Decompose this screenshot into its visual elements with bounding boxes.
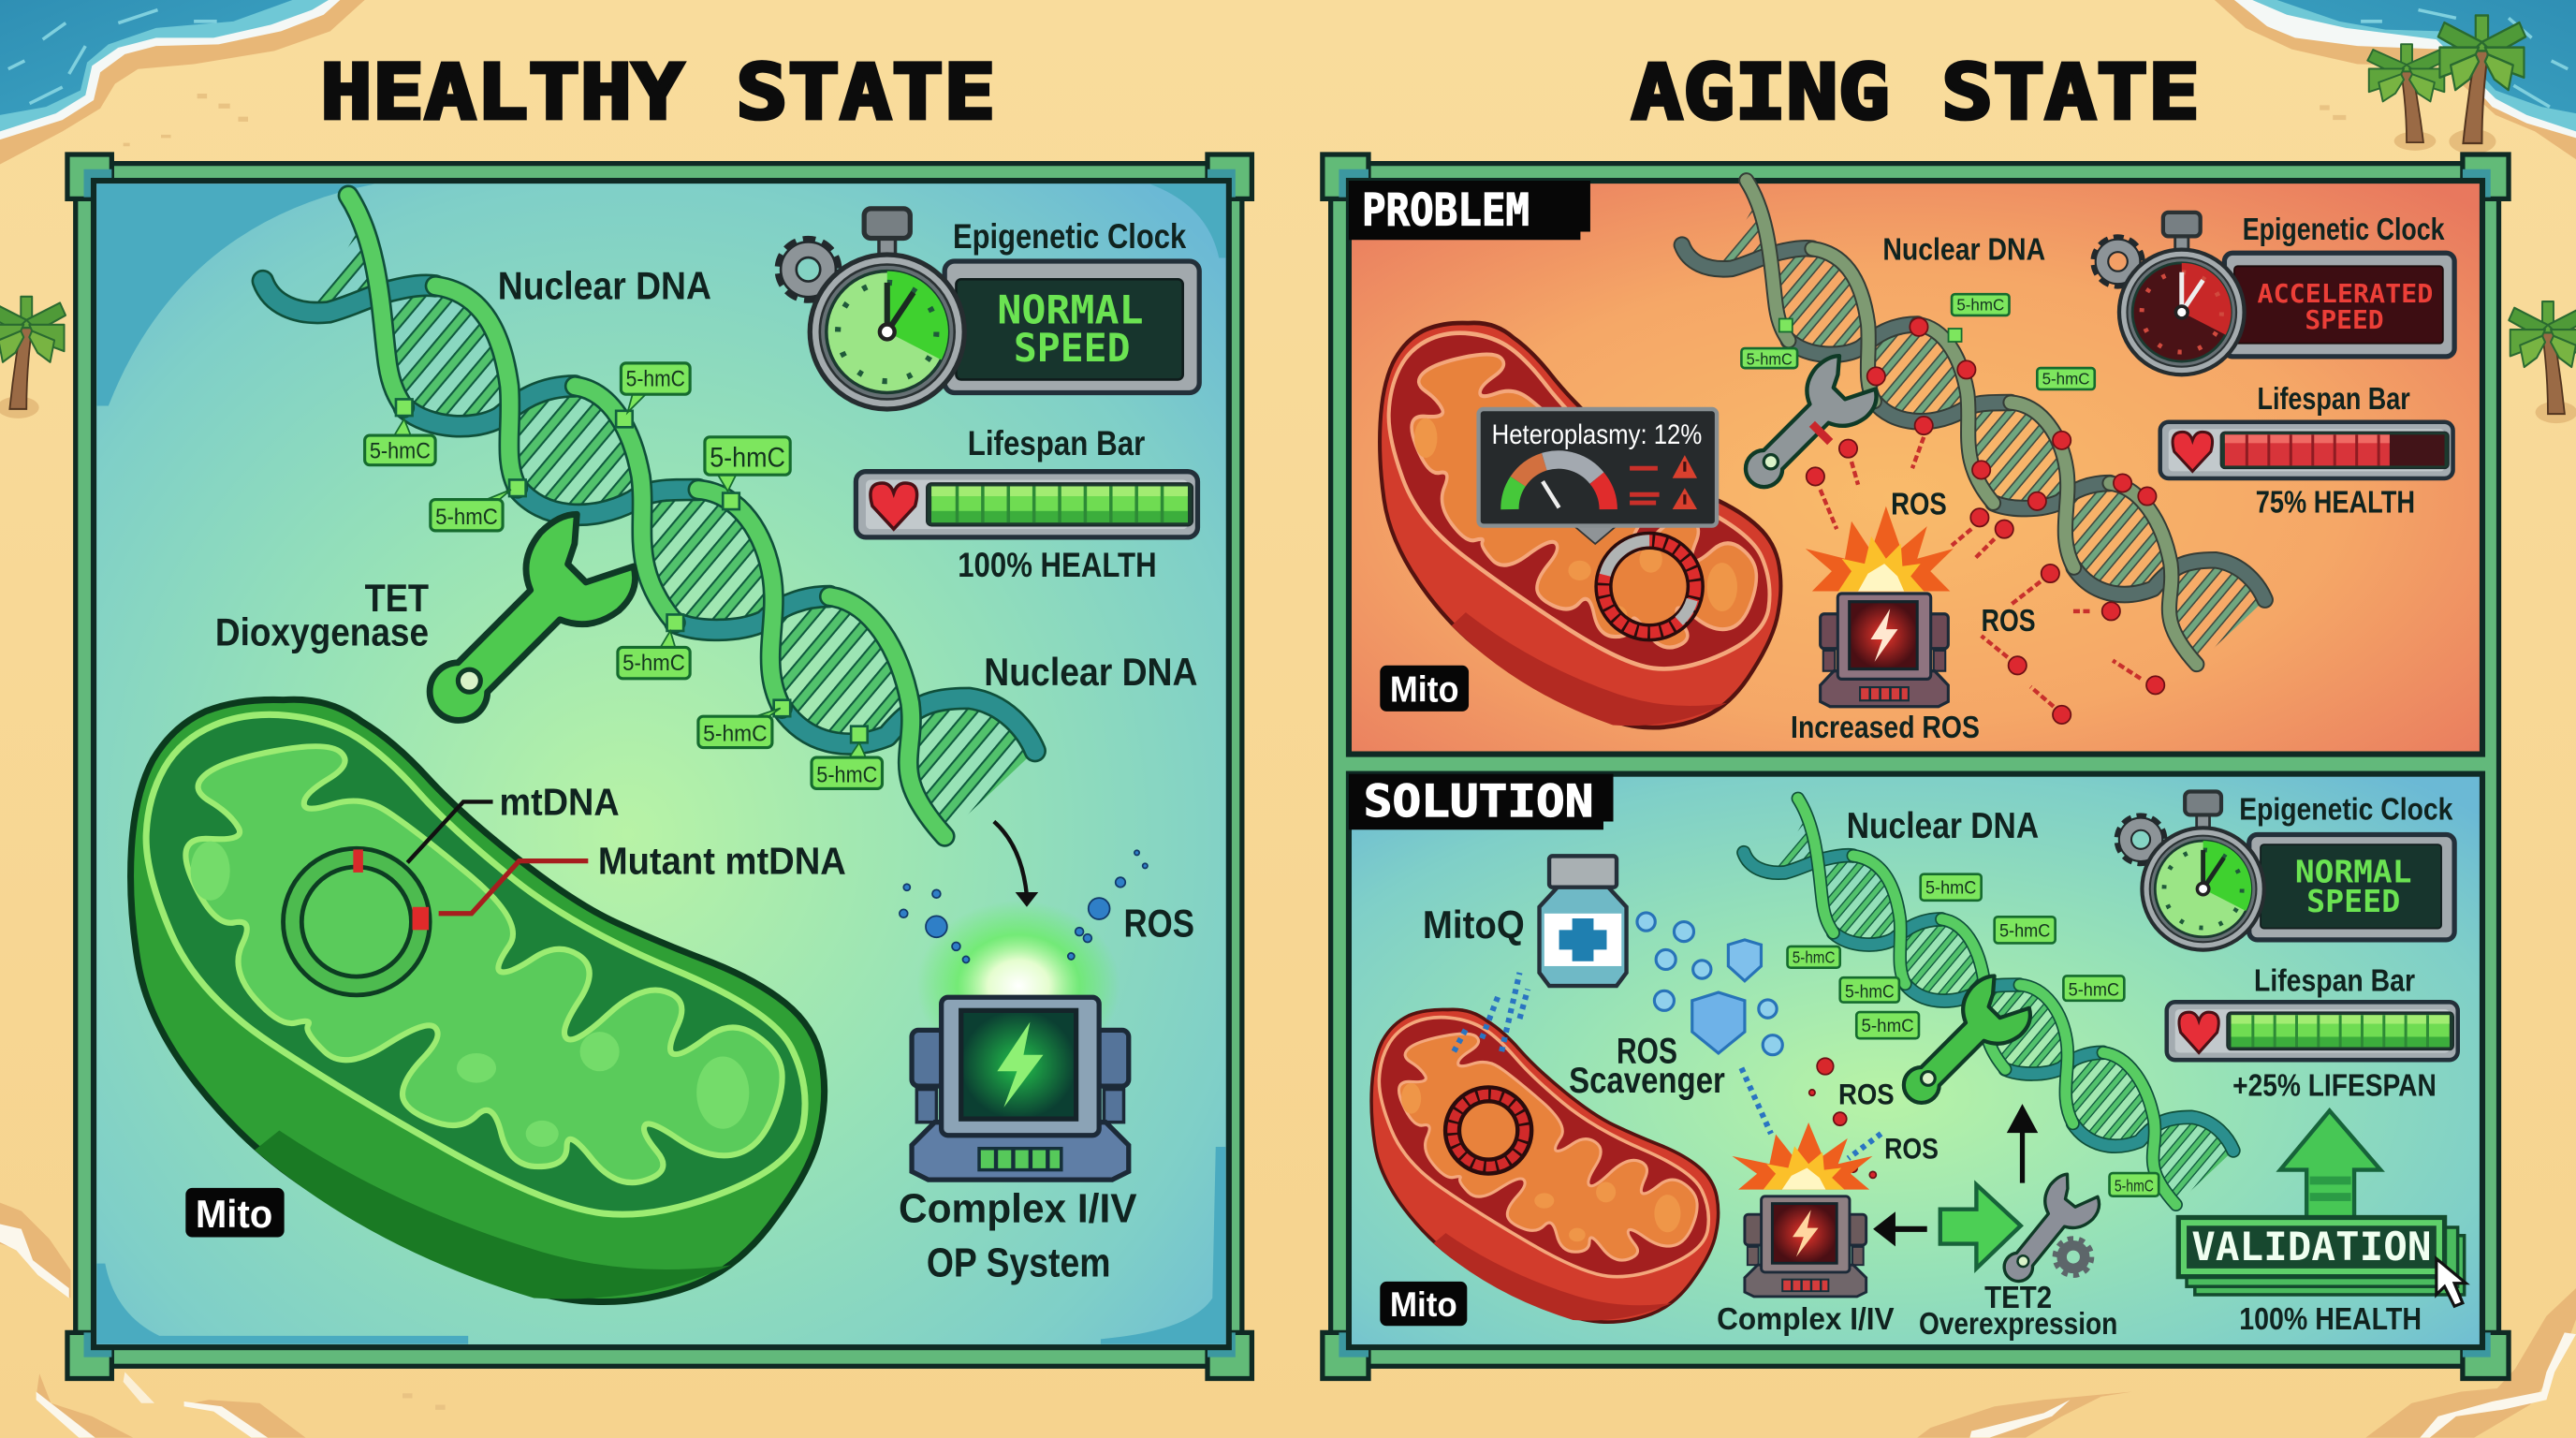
5-hmC tags: [1741, 294, 2095, 389]
lifespan bar: 75%: [2160, 382, 2453, 521]
5-hmC tags: 5-hmC: [370, 440, 431, 464]
callout: heteroplasmy: Heteroplasmy: 12%: [1492, 419, 1702, 450]
lifespan bar: full: +25% LIFESPAN: [2232, 1069, 2437, 1104]
label: tet2 overexpression: [1919, 1281, 2117, 1342]
explosion: [1732, 1123, 1872, 1190]
icon: complex system: [912, 997, 1129, 1180]
5-hmC tags: 5-hmC: [1925, 879, 1976, 899]
5-hmC tags: [1788, 874, 2159, 1196]
5-hmC tags: 5-hmC: [703, 723, 768, 747]
epigenetic clock readout: normal: [2118, 791, 2454, 950]
mitochondrion: under repair: [1371, 1009, 1719, 1322]
sand specks: [124, 94, 2346, 1410]
panel: healthy state: [67, 154, 1251, 1378]
label: nuclear dna: Nuclear DNA: [1882, 232, 2045, 267]
5-hmC tags: 5-hmC: [816, 763, 877, 787]
epigenetic clock readout: NORMAL: [997, 287, 1144, 333]
icon: ros scavenger bubbles and shields: [1637, 913, 1782, 1055]
icon: cursor: [2437, 1258, 2466, 1306]
label: mito: Mito: [1390, 1285, 1457, 1324]
ros trails: [1821, 437, 2141, 707]
palm tree: right: [2509, 301, 2576, 423]
button: validation: VALIDATION: [2191, 1224, 2432, 1269]
labels: ros: ROS: [1884, 1131, 1939, 1165]
labels: ros: ROS: [1982, 604, 2036, 638]
dna helix: damaged: [1682, 181, 2265, 665]
wet sand: bottom left: [0, 1203, 305, 1438]
palm tree: left: [0, 297, 66, 418]
warning icons: [1630, 455, 1697, 509]
button: validation: [2178, 1217, 2466, 1306]
mtdna ring: [292, 849, 429, 986]
panel frame: [1323, 154, 2509, 1378]
icon: green wrench: [1885, 969, 2039, 1122]
labels: ros: ROS: [1891, 487, 1947, 521]
epigenetic clock readout: normal: NORMAL: [2295, 853, 2411, 889]
label: mito: Mito: [1390, 669, 1459, 710]
icon: tet dioxygenase wrench: [400, 503, 649, 752]
label: mutant mtdna: Mutant mtDNA: [598, 840, 846, 883]
lifespan bar: 75%: Lifespan Bar: [2258, 382, 2410, 417]
icon: ros bubbles: [900, 850, 1148, 962]
label: 100% health: 100% HEALTH: [2239, 1302, 2422, 1337]
epigenetic clock readout: accelerated: [2095, 213, 2454, 374]
5-hmC tags: 5-hmC: [2069, 981, 2119, 1001]
epigenetic clock readout: Epigenetic Clock: [953, 217, 1187, 256]
complex glow: [916, 901, 1120, 1071]
heading: solution: SOLUTION: [1364, 776, 1593, 828]
palm tree: top right small: [2367, 44, 2446, 151]
lifespan bar: Lifespan Bar: [968, 424, 1145, 462]
5-hmC tags: 5-hmC: [1862, 1017, 1914, 1036]
epigenetic clock readout: normal: Epigenetic Clock: [2239, 793, 2453, 828]
leader line: mutant mtdna: [439, 861, 588, 914]
label: tet dioxygenase: [215, 576, 429, 654]
epigenetic clock readout: accelerated: ACCELERATED: [2258, 280, 2433, 309]
label: ros scavenger: ROS: [1617, 1032, 1677, 1072]
labels: ros: [1891, 487, 2036, 638]
heading: problem: [1349, 181, 1590, 240]
labels: ros: ROS: [1838, 1077, 1895, 1110]
mitochondrion: healthy: [131, 699, 825, 1302]
5-hmC tags: 5-hmC: [2115, 1176, 2154, 1195]
label: complex i/iv op system: [899, 1186, 1137, 1286]
label: complex i/iv: Complex I/IV: [1717, 1302, 1895, 1337]
lifespan bar: full: [2167, 963, 2458, 1104]
5-hmC tags: 5-hmC: [710, 442, 785, 473]
arrow: tet2 green: [1940, 1184, 2021, 1269]
explosion: [1806, 506, 1954, 591]
label: nuclear dna: Nuclear DNA: [1847, 806, 2039, 846]
arrow: left to complex: [1878, 1217, 1927, 1240]
5-hmC tags: 5-hmC: [1747, 350, 1793, 369]
lifespan bar: 75%: 75% HEALTH: [2256, 486, 2415, 521]
sub-panel: solution: [1349, 774, 2482, 1347]
solution background: [1349, 774, 2482, 1347]
wet sand: bottom right: [1917, 1288, 2576, 1438]
label: ros scavenger: [1569, 1032, 1725, 1101]
mitochondrion: damaged: [1380, 323, 1780, 727]
5-hmC tags: 5-hmC: [622, 652, 685, 676]
label: ros: ROS: [1123, 901, 1194, 945]
labels: ros: [1838, 1077, 1939, 1165]
icon: mitoq bottle: [1540, 856, 1627, 986]
5-hmC tags: 5-hmC: [1999, 921, 2050, 941]
label: tet dioxygenase: Dioxygenase: [215, 610, 429, 654]
icon: blue particles on mitochondrion: [1454, 973, 1881, 1158]
arrow: dna to complex: [994, 822, 1038, 907]
problem background: [1349, 181, 2482, 755]
5-hmC tags: [365, 363, 882, 788]
heading: problem: PROBLEM: [1362, 184, 1530, 236]
icon: tet2 wrench and gear: [1989, 1169, 2106, 1296]
5-hmC tags: 5-hmC: [435, 506, 498, 530]
label: increased ros: Increased ROS: [1791, 711, 1980, 745]
ocean: top right: [2215, 0, 2576, 159]
palm tree: top right large: [2438, 15, 2525, 154]
label: nuclear dna lower: Nuclear DNA: [984, 650, 1197, 694]
label: nuclear dna: Nuclear DNA: [498, 263, 711, 307]
icon: complex system overloaded: [1821, 594, 1948, 707]
epigenetic clock readout: accelerated: SPEED: [2305, 306, 2384, 335]
5-hmC tags: 5-hmC: [2042, 370, 2089, 389]
label: tet2 overexpression: Overexpression: [1919, 1307, 2117, 1342]
leader line: mtdna: [407, 801, 493, 862]
gauge: [1510, 460, 1608, 509]
5-hmC tags: 5-hmC: [1845, 982, 1895, 1002]
panel corner shading: [97, 184, 1225, 1344]
epigenetic clock readout: [781, 209, 1199, 409]
label: complex i/iv op system: OP System: [927, 1240, 1110, 1286]
mtdna ring: [1453, 1094, 1525, 1167]
dna helix: nuclear dna: [263, 196, 1035, 836]
label: ros scavenger: Scavenger: [1569, 1061, 1725, 1101]
lifespan bar: full: Lifespan Bar: [2254, 963, 2415, 998]
label: mtdna: mtDNA: [500, 780, 620, 823]
damage: red lesions and ros particles: [1807, 318, 2164, 724]
icon: complex system: [1745, 1196, 1866, 1297]
epigenetic clock readout: SPEED: [1014, 325, 1131, 371]
green nodes: [1779, 318, 1962, 342]
panel: aging state: [1323, 154, 2509, 1378]
lifespan bar: 100% HEALTH: [958, 546, 1157, 584]
5-hmC tags: 5-hmC: [626, 367, 685, 391]
label: complex i/iv op system: Complex I/IV: [899, 1186, 1137, 1232]
arrow: up to dna: [2011, 1109, 2034, 1183]
icon: broken wrench: [1727, 348, 1884, 506]
sub-panel: problem: [1349, 181, 2482, 755]
5-hmC tags: 5-hmC: [1956, 296, 2004, 315]
title: healthy state: HEALTHY STATE: [320, 49, 996, 137]
epigenetic clock readout: accelerated: Epigenetic Clock: [2243, 213, 2445, 247]
ocean: top left: [0, 0, 365, 165]
5-hmC tags: 5-hmC: [1793, 947, 1835, 966]
title: aging state: AGING STATE: [1632, 49, 2200, 137]
red ros particles: [1809, 1058, 1876, 1178]
label: mitoq: MitoQ: [1423, 902, 1525, 946]
arrow: big up: [2280, 1110, 2380, 1219]
label: tet dioxygenase: TET: [365, 576, 429, 620]
callout: heteroplasmy: [1479, 409, 1717, 544]
dna helix: restored: [1744, 799, 2233, 1205]
label: mito: Mito: [196, 1192, 272, 1236]
epigenetic clock readout: normal: SPEED: [2306, 883, 2400, 919]
mutated mtdna ring: [1603, 540, 1695, 633]
label: tet2 overexpression: TET2: [1984, 1281, 2052, 1315]
panel frame: [67, 154, 1251, 1378]
lifespan bar: [856, 424, 1197, 584]
